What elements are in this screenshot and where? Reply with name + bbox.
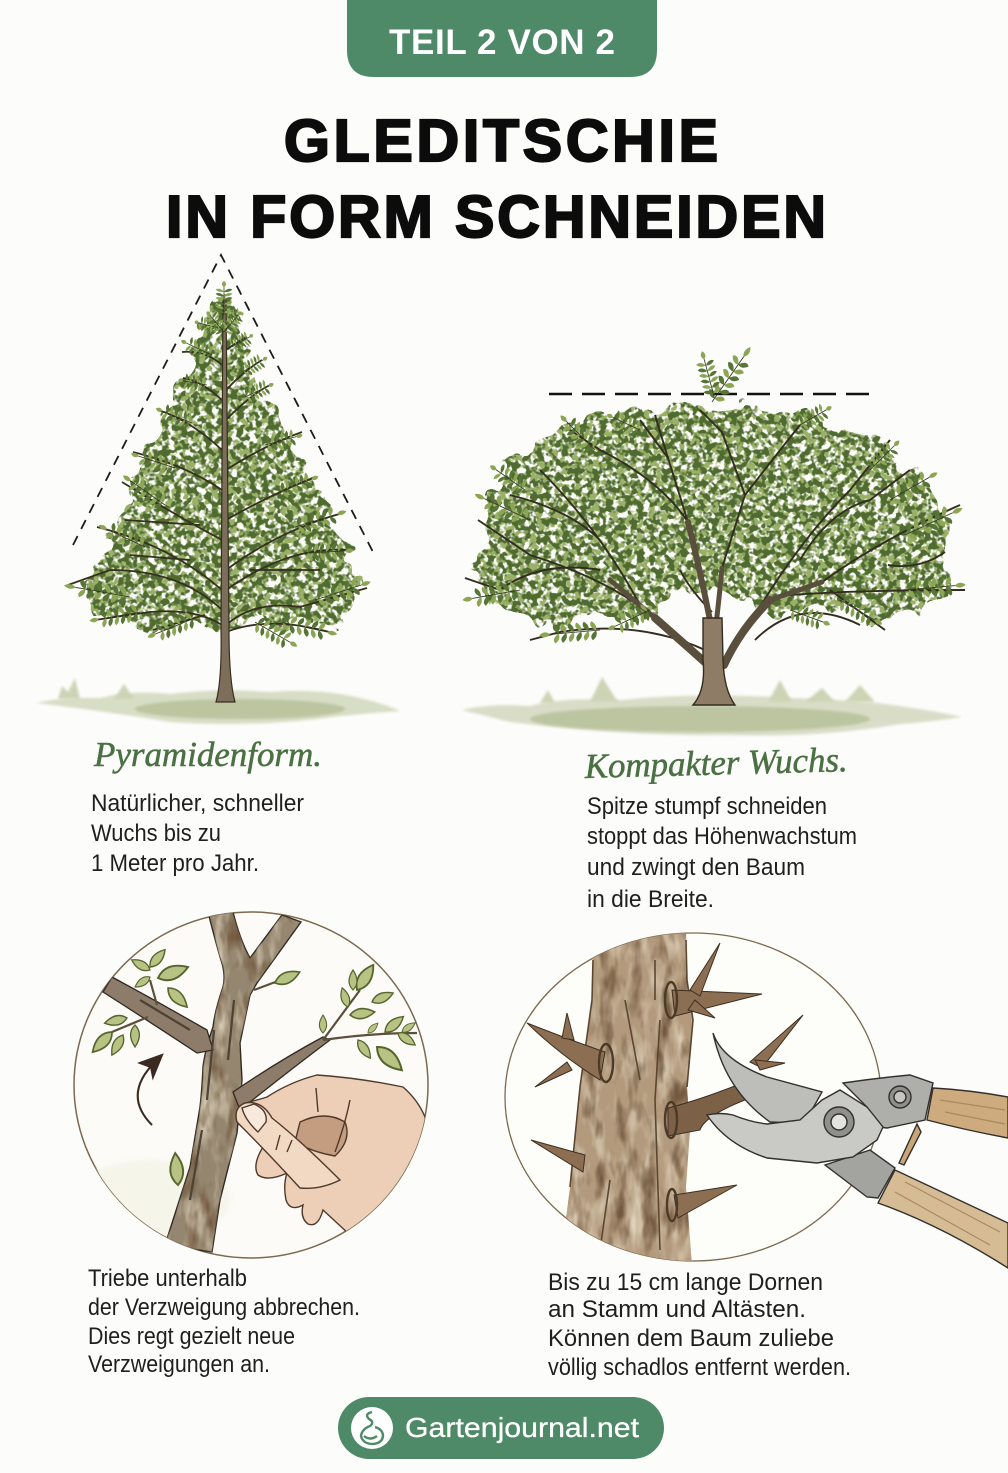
text block: 1 Meter pro Jahr.	[91, 850, 259, 877]
trunk	[560, 930, 693, 1265]
text block: Natürlicher, schneller	[91, 790, 304, 817]
knots	[599, 982, 677, 1221]
foliage tips	[461, 342, 967, 645]
heading: Pyramidenform.	[93, 735, 322, 774]
upper jaw	[843, 1075, 933, 1128]
foliage tips	[62, 281, 373, 654]
caption: breaking shoots	[88, 1265, 360, 1378]
handle: upper wood	[927, 1088, 1008, 1138]
text block: in die Breite.	[587, 886, 714, 913]
branch	[165, 912, 301, 1252]
caption: Pyramidenform	[91, 735, 322, 877]
caption: thorns: an Stamm und Altästen.	[548, 1296, 806, 1323]
caption: breaking shoots: der Verzweigung abbrechen.	[88, 1294, 360, 1321]
bark texture	[560, 930, 693, 1265]
bolts	[824, 1107, 854, 1137]
watercolor wash	[95, 1161, 228, 1240]
handle: lower wood	[878, 1170, 1008, 1268]
arrow	[138, 1055, 162, 1125]
heading: Kompakter Wuchs.	[583, 740, 848, 786]
caption: Kompakter Wuchs	[583, 740, 857, 913]
badge: part 2 of 2	[347, 0, 657, 77]
text block: stoppt das Höhenwachstum	[587, 823, 857, 850]
lower blade	[707, 1090, 883, 1163]
dashed pyramid outline	[73, 255, 373, 552]
pruner	[707, 1033, 1008, 1268]
title	[166, 108, 826, 250]
foliage mass	[478, 405, 948, 625]
caption: thorns: Können dem Baum zuliebe	[548, 1325, 834, 1352]
shoot	[233, 1037, 330, 1110]
caption: thorns: Bis zu 15 cm lange Dornen	[548, 1269, 823, 1296]
upper blade	[713, 1033, 822, 1123]
caption: breaking shoots: Verzweigungen an.	[88, 1351, 270, 1378]
illustration: pyramid tree	[37, 281, 400, 724]
bark texture	[165, 912, 301, 1252]
panel: thorns and pruner	[505, 930, 1008, 1268]
hand	[236, 1075, 430, 1235]
icon: logo	[351, 1407, 393, 1449]
title: IN FORM SCHNEIDEN	[166, 184, 826, 250]
thorns left	[527, 1013, 605, 1172]
text block	[91, 790, 304, 877]
wood grain	[895, 1100, 1005, 1245]
brand text: Gartenjournal.net	[405, 1412, 639, 1443]
branches and trunk	[465, 410, 965, 705]
panel: hand breaking shoot	[70, 912, 430, 1258]
caption: breaking shoots: Triebe unterhalb	[88, 1265, 247, 1292]
badge: part 2 of 2: TEIL 2 VON 2	[389, 23, 615, 62]
thorns right	[668, 943, 803, 1218]
text block	[587, 793, 857, 913]
illustration: compact tree	[461, 342, 967, 736]
caption: thorns	[548, 1269, 851, 1381]
spring	[899, 1124, 921, 1165]
footer badge	[338, 1397, 664, 1459]
foliage mass	[85, 300, 360, 632]
branches and trunk	[68, 300, 367, 702]
caption: thorns: völlig schadlos entfernt werden.	[548, 1354, 851, 1381]
dashed cut line	[549, 393, 879, 395]
ground	[37, 678, 400, 724]
text block: Wuchs bis zu	[91, 820, 221, 847]
caption: breaking shoots: Dies regt gezielt neue	[88, 1323, 295, 1350]
leaves	[89, 947, 418, 1186]
text block: und zwingt den Baum	[587, 854, 805, 881]
bark marks	[140, 1000, 234, 1200]
text block: Spitze stumpf schneiden	[587, 793, 827, 820]
ground	[462, 677, 962, 736]
title: GLEDITSCHIE	[284, 108, 718, 174]
side branch	[103, 977, 213, 1053]
lower jaw	[825, 1150, 895, 1198]
